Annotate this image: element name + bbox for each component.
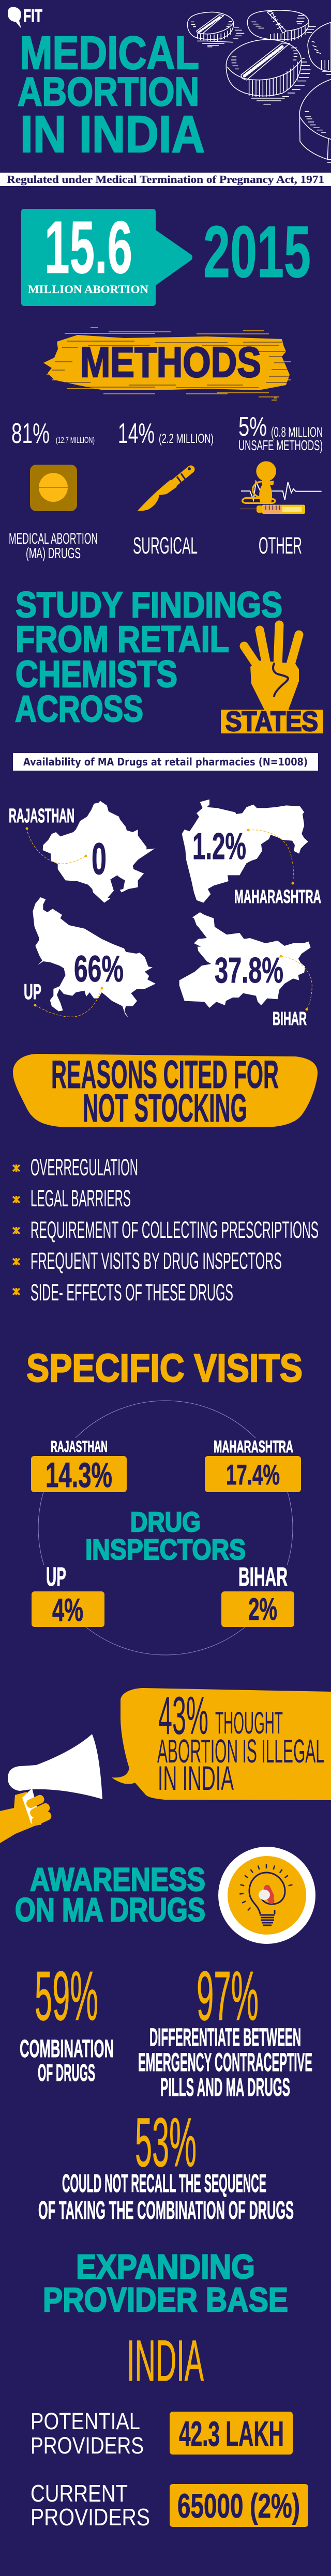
Maharashtra visits <box>205 1437 301 1492</box>
stat: 59%: OF DRUGS <box>38 2059 95 2086</box>
method: medical abortion <box>9 417 98 562</box>
map: Bihar: 37.8% <box>215 950 283 990</box>
Rajasthan visits: 14.3% <box>46 1455 112 1495</box>
stat: 59% <box>20 1957 114 2086</box>
map: Bihar <box>179 912 312 1029</box>
map: Bihar: BIHAR <box>273 1008 307 1029</box>
method: other <box>238 412 323 559</box>
row: potential providers: POTENTIAL <box>31 2408 140 2434</box>
stat: 81%: (12.7 MILLION) <box>56 435 95 445</box>
icon: light bulb with pills <box>223 1851 311 1939</box>
map: Rajasthan: RAJASTHAN <box>9 805 74 827</box>
stat: 59%: COMBINATION <box>20 2035 114 2063</box>
UP visits: 4% <box>52 1592 83 1628</box>
stat: 53% <box>38 2104 294 2225</box>
row: potential providers <box>31 2408 293 2459</box>
stat: 97% <box>138 1957 312 2102</box>
stat: 5% <box>238 412 323 453</box>
row: potential providers: PROVIDERS <box>31 2432 144 2459</box>
infographic: INDIA <box>127 2328 204 2393</box>
callout: 15.6 million abortions: 15.6 <box>44 206 132 289</box>
stat: 5%: 5% <box>238 412 267 442</box>
states label: STATES <box>225 706 318 737</box>
icon: tablet <box>30 465 77 511</box>
map: Rajasthan <box>9 801 155 903</box>
banner: reasons cited <box>13 1053 318 1130</box>
heading: awareness on MA drugs: ON MA DRUGS <box>15 1891 205 1928</box>
map: Rajasthan: 0 <box>92 834 107 884</box>
reason 5 <box>13 1279 233 1306</box>
illustration: pills <box>188 10 331 162</box>
stat: 14%: 14% <box>118 417 155 449</box>
icon: scalpel <box>138 467 191 511</box>
label: SURGICAL <box>133 532 198 559</box>
title: MEDICAL <box>20 27 199 79</box>
methods heading on brush stroke <box>43 328 291 400</box>
stat: 53%: 53% <box>135 2104 197 2181</box>
Bihar visits: BIHAR <box>238 1562 288 1591</box>
subtitle band: Regulated under Medical Termination of Pregnancy Act, 1971 <box>7 173 324 186</box>
stat: 81%: 81% <box>11 417 50 449</box>
heading: awareness on MA drugs: AWARENESS <box>30 1862 205 1898</box>
UP visits: UP <box>46 1562 66 1591</box>
map: Uttar Pradesh: 66% <box>74 949 124 990</box>
heading: study findings: STUDY FINDINGS <box>16 585 282 625</box>
row: current providers: PROVIDERS <box>31 2504 150 2531</box>
reason 2: LEGAL BARRIERS <box>31 1185 131 1212</box>
icon: hand showing four fingers <box>244 625 299 711</box>
callout: 43% thought abortion is illegal: 43% <box>158 1686 208 1746</box>
callout: 15.6 million abortions: MILLION ABORTION <box>28 283 148 296</box>
heading: expanding provider base: PROVIDER BASE <box>43 2280 288 2319</box>
heading: study findings: ACROSS <box>15 689 143 730</box>
title: ABORTION <box>18 69 199 114</box>
heading: study findings <box>15 585 282 730</box>
label: (MA) DRUGS <box>26 545 81 562</box>
map: Uttar Pradesh <box>24 897 156 1018</box>
availability label <box>13 753 318 771</box>
list: reasons <box>13 1154 319 1306</box>
heading: expanding provider base: EXPANDING <box>76 2247 255 2286</box>
Bihar visits: 2% <box>248 1592 277 1627</box>
map: Maharashtra: 1.2% <box>192 826 246 867</box>
label: MEDICAL ABORTION <box>9 530 98 547</box>
callout: 43% thought abortion is illegal <box>112 1686 331 1800</box>
row: current providers <box>31 2480 308 2531</box>
stat: 14% <box>118 417 214 449</box>
row: current providers: CURRENT <box>31 2480 128 2507</box>
logo: FIT <box>8 6 42 28</box>
diagram: drug inspector visits ring <box>31 1401 301 1655</box>
stat: 14%: (2.2 MILLION) <box>159 432 214 446</box>
Bihar visits <box>221 1562 294 1627</box>
map: Uttar Pradesh: UP <box>24 979 41 1004</box>
centre label: INSPECTORS <box>85 1533 246 1566</box>
reason 1 <box>13 1154 138 1180</box>
title <box>18 27 205 163</box>
map: Maharashtra <box>182 800 321 907</box>
Maharashtra visits: 17.4% <box>226 1459 280 1491</box>
stat: 59%: 59% <box>35 1957 98 2035</box>
methods heading on brush stroke: METHODS <box>80 338 261 386</box>
heading: awareness on MA drugs <box>15 1862 205 1928</box>
stat: 81% <box>11 417 95 449</box>
title: IN INDIA <box>20 105 205 163</box>
label <box>9 530 98 562</box>
method: surgical <box>118 417 214 559</box>
callout: 43% thought abortion is illegal: IN INDIA <box>158 1759 234 1797</box>
centre label: DRUG <box>130 1507 201 1538</box>
Rajasthan visits <box>31 1437 127 1495</box>
list: reasons: OVERREGULATION <box>31 1154 138 1180</box>
heading: study findings: CHEMISTS <box>16 654 177 695</box>
icon: megaphone in hand <box>0 1734 102 1843</box>
centre label <box>85 1507 246 1566</box>
icon: medical equipment <box>240 461 322 514</box>
UP visits <box>32 1562 104 1628</box>
heading: study findings: FROM RETAIL <box>16 619 229 660</box>
Rajasthan visits: RAJASTHAN <box>51 1437 108 1455</box>
logo: FIT: FIT <box>23 6 42 26</box>
reason 2 <box>13 1185 131 1212</box>
heading: expanding provider base <box>43 2247 288 2319</box>
